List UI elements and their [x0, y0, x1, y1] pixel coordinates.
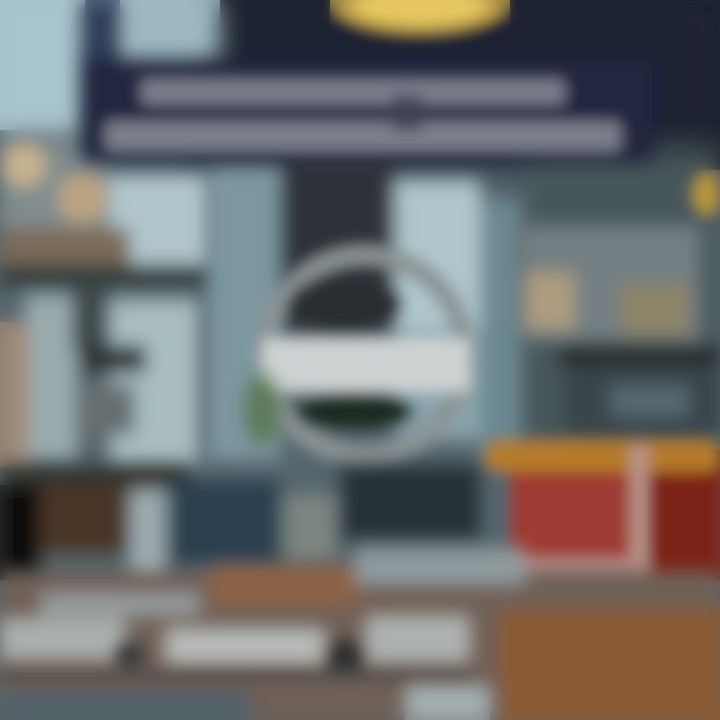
title banner — [84, 58, 654, 162]
table surface — [0, 548, 720, 720]
title line bars (source text illegible) — [104, 78, 622, 152]
badge dark upper area — [289, 279, 401, 331]
right wall lamp — [692, 172, 720, 216]
banner panel — [84, 58, 654, 162]
red sofa — [485, 440, 720, 580]
central window and columns — [80, 0, 520, 460]
laptop or tray on table — [0, 592, 470, 664]
badge dark lower area — [297, 394, 413, 430]
plant — [244, 374, 280, 446]
wooden table — [0, 548, 720, 720]
ceiling lamp — [336, 0, 504, 34]
badge ring — [265, 255, 465, 455]
left window and shelves — [0, 0, 210, 467]
table front edge — [0, 685, 490, 720]
table dark details — [0, 638, 470, 682]
badge label band — [262, 338, 470, 392]
right shelves — [520, 225, 720, 435]
lower wall and table backdrop — [0, 465, 480, 580]
center circular badge — [244, 255, 470, 455]
